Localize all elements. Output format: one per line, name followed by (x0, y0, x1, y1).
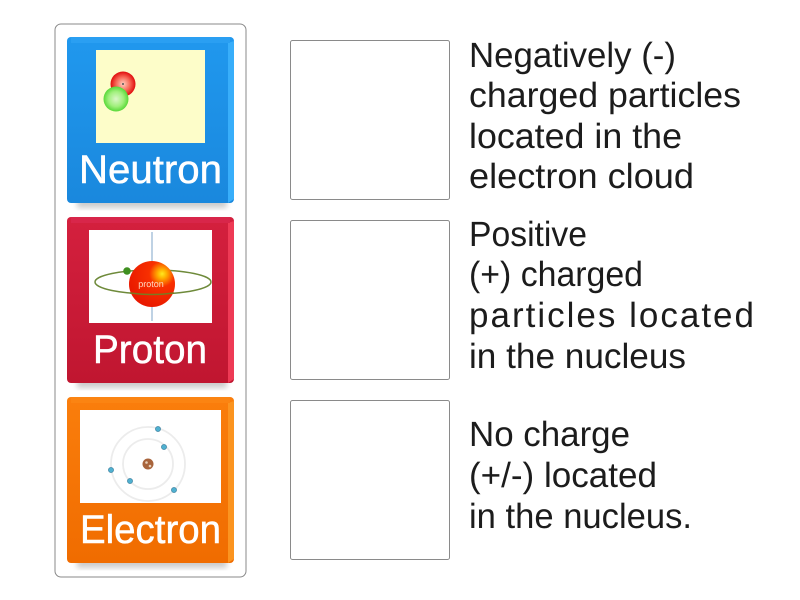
description: negative charge: located in the (469, 117, 682, 156)
image: proton atom: proton (138, 279, 164, 289)
tile: Electron (67, 397, 234, 568)
image: proton atom (89, 230, 212, 323)
description: no charge: in the nucleus. (469, 497, 692, 536)
description: negative charge: electron cloud (469, 157, 694, 196)
label: Neutron: Neutron (79, 148, 222, 192)
tile: Neutron (67, 37, 234, 208)
description: positive charge: particles located (469, 296, 754, 335)
description: negative charge: charged particles (469, 76, 741, 115)
description: no charge: (+/-) located (469, 456, 657, 495)
description: negative charge: Negatively (-) (469, 36, 676, 75)
answer box 3 (290, 400, 450, 560)
tile: Proton (67, 217, 234, 388)
answer box 1 (290, 40, 450, 200)
label: Proton: Proton (93, 328, 207, 372)
image: electron shells (80, 410, 221, 503)
panel: term tiles (55, 24, 246, 577)
description: positive charge: Positive (469, 215, 587, 254)
description: positive charge (469, 215, 754, 376)
description: positive charge: (+) charged (469, 255, 643, 294)
answer box 2 (290, 220, 450, 380)
label: Electron: Electron (80, 508, 221, 552)
description: no charge (469, 415, 692, 536)
description: negative charge (469, 36, 741, 196)
image: neutron atom (96, 50, 205, 143)
description: positive charge: in the nucleus (469, 337, 686, 376)
description: no charge: No charge (469, 415, 630, 454)
